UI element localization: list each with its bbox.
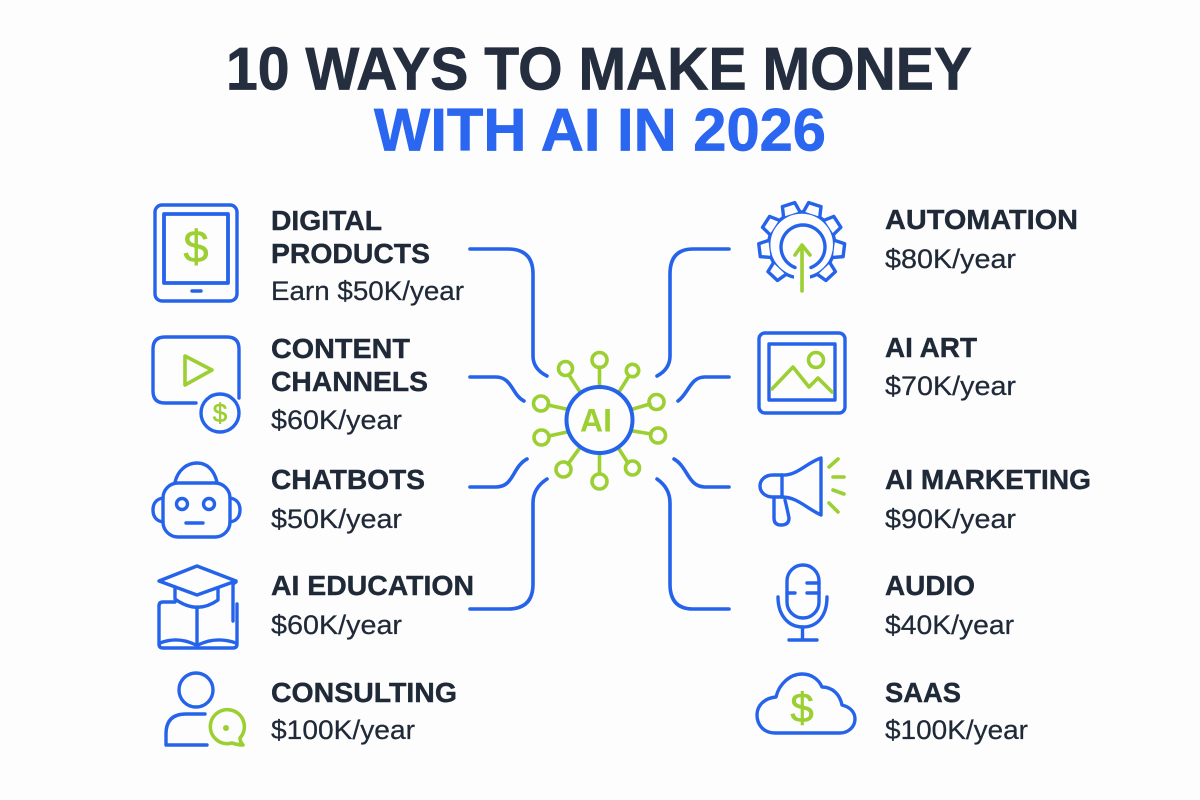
icon: person with speech bubble [166,673,244,745]
connector lines [470,249,729,609]
icon: cloud with dollar [757,674,855,733]
hub circle [566,387,632,453]
label: content channels: CHANNELS [271,366,428,397]
label: automation [885,204,1078,274]
label: digital products: Earn $50K/year [271,276,464,306]
title: 10 WAYS TO MAKE MONEY [226,36,972,102]
label: chatbots [271,464,425,534]
label: AI art: $70K/year [885,371,1016,401]
title [226,36,972,164]
icon: gear with arrow [758,202,845,291]
item: automation [758,202,1078,291]
label: content channels [271,333,428,435]
icon: framed picture [759,333,845,413]
icon: video with coin: $ [213,398,228,428]
hub spokes [548,367,651,474]
label: AI art [885,332,1016,401]
label: AI education [271,570,474,640]
label: digital products: PRODUCTS [271,238,430,269]
label: automation: $80K/year [885,244,1016,274]
item: AI art [759,332,1016,413]
item: SaaS [757,674,1028,745]
item: audio [778,565,1014,640]
icon: tablet with dollar [155,205,237,301]
item: chatbots [153,463,425,537]
item: consulting [166,673,457,745]
icon: microphone [778,565,827,640]
label: AI marketing: AI MARKETING [885,464,1091,495]
label: SaaS: SAAS [885,677,961,708]
hub nodes [534,352,666,489]
label: consulting: CONSULTING [271,677,457,708]
label: digital products: DIGITAL [271,205,382,236]
label: digital products [271,205,464,306]
central AI hub [534,352,666,489]
label: consulting [271,677,457,745]
icon: graduation cap and book [159,566,237,648]
label: automation: AUTOMATION [885,204,1078,235]
icon: megaphone [760,458,844,525]
label: AI art: AI ART [885,332,977,363]
item: AI marketing [760,458,1091,534]
title: WITH AI IN 2026 [374,96,826,164]
item: AI education [159,566,474,648]
hub label: AI [580,402,612,438]
icon: cloud with dollar: $ [790,684,814,731]
label: audio: $40K/year [885,610,1014,640]
item: digital products [155,205,464,306]
label: consulting: $100K/year [271,715,415,745]
label: AI education: $60K/year [271,610,402,640]
icon: video with coin [153,337,239,432]
label: AI education: AI EDUCATION [271,570,474,601]
icon: robot [153,463,240,537]
label: chatbots: CHATBOTS [271,464,425,495]
label: AI marketing [885,464,1091,534]
label: SaaS: $100K/year [885,715,1028,745]
icon: tablet with dollar: $ [183,221,209,272]
label: content channels: CONTENT [271,333,410,364]
label: content channels: $60K/year [271,405,402,435]
item: content channels [153,333,428,435]
label: audio: AUDIO [885,570,975,601]
label: AI marketing: $90K/year [885,504,1016,534]
label: SaaS [885,677,1028,745]
label: audio [885,570,1014,640]
label: chatbots: $50K/year [271,504,402,534]
